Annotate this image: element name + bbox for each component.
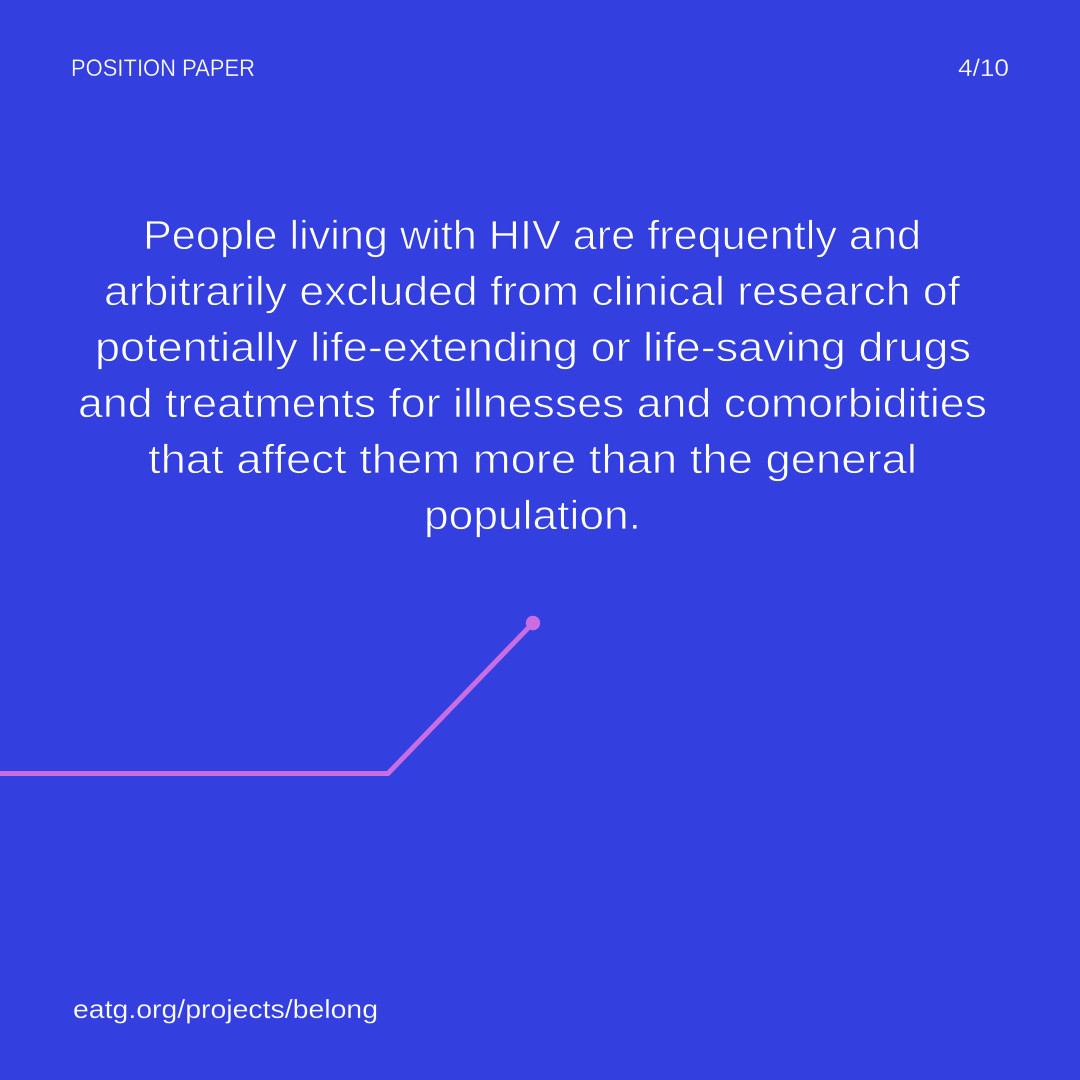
main statement text: People living with HIV are frequently and [143,212,921,258]
main statement text: and treatments for illnesses and comorbidities [78,380,987,426]
decorative connector line with dot [0,616,540,774]
main statement text: potentially life-extending or life-saving drugs [95,324,971,370]
footer url: eatg.org/projects/belong [73,994,378,1024]
header label: position paper: POSITION PAPER [71,55,255,82]
page number: 4/10 [958,55,1009,82]
main statement text [78,212,987,538]
main statement text: that affect them more than the general [148,436,917,482]
main statement text: arbitrarily excluded from clinical research of [104,268,961,314]
main statement text: population. [424,492,641,538]
